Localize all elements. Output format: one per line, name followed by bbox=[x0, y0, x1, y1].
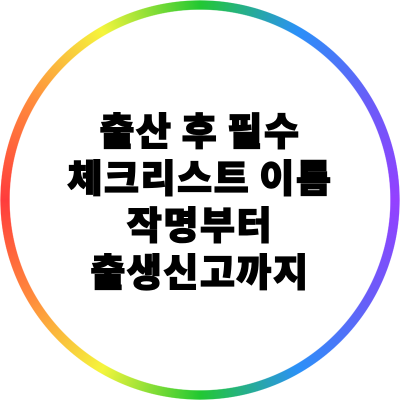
title: 작명부터 bbox=[127, 206, 273, 248]
title: 출생신고까지 bbox=[90, 253, 310, 295]
title: 체크리스트 이름 bbox=[67, 159, 333, 201]
title: 출산 후 필수 bbox=[99, 112, 301, 154]
title bbox=[67, 112, 333, 295]
